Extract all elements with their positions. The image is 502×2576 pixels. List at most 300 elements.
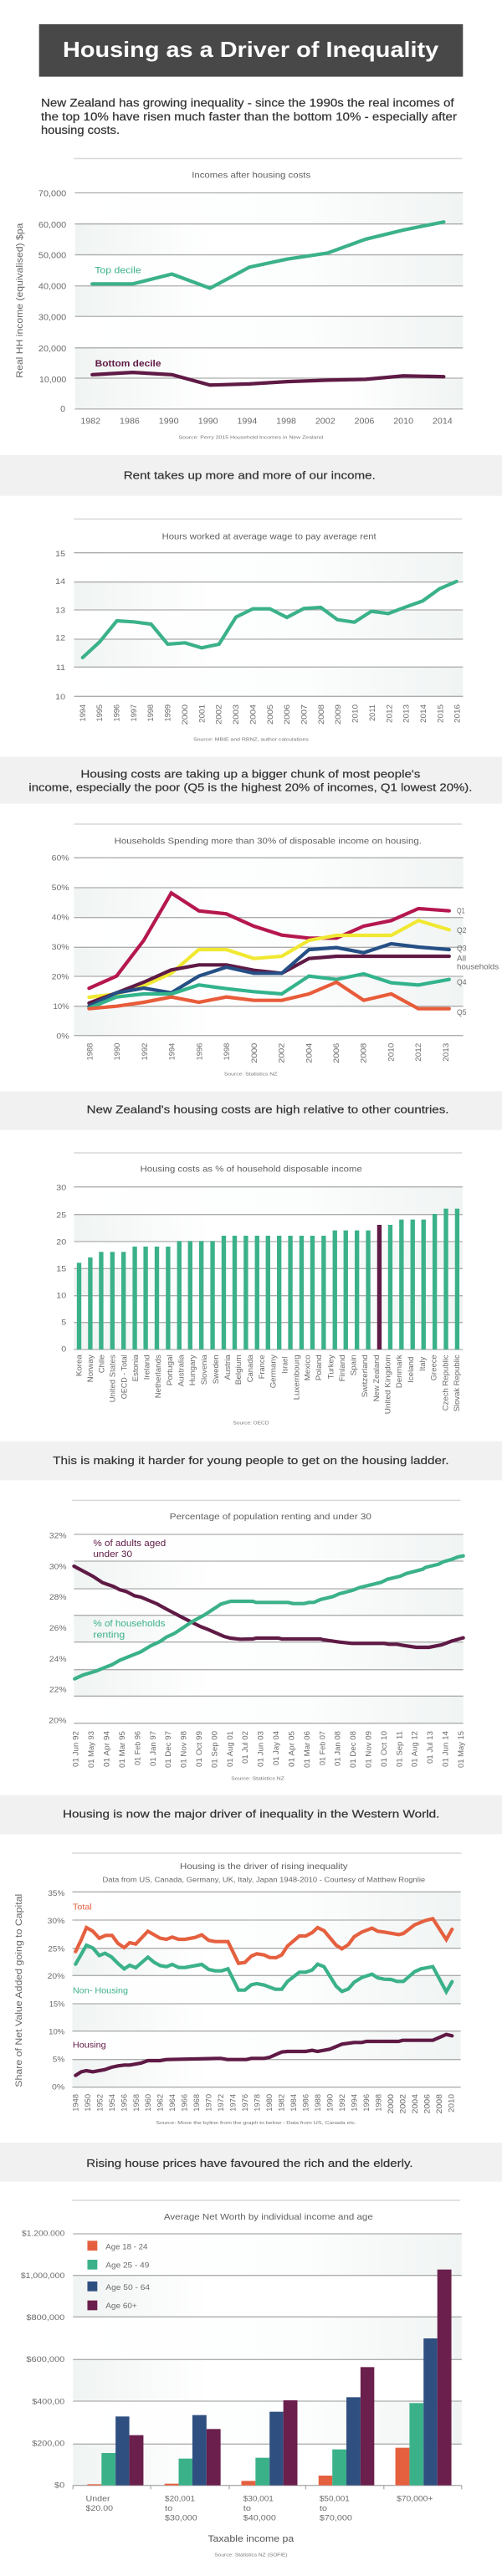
series labels: Q1 [457,907,465,915]
y axis labels: 0 [60,405,65,414]
y axis labels: 13 [55,607,65,615]
label: housing: Housing [73,2041,106,2050]
label: households renting: renting [93,1631,125,1640]
x axis labels: 2002 [398,2094,407,2113]
panel: incomes after housing costs chart [15,158,463,441]
x axis labels [86,2495,433,2522]
x axis labels: 2014 [418,704,428,723]
source: Source: Statistics NZ [231,1776,284,1782]
x axis labels: 1948 [70,2094,79,2112]
x axis labels: 01 Sep 00 [209,1731,218,1768]
label: total: Total [73,1903,92,1912]
x axis labels [70,2094,456,2113]
bar chart: countries [56,1153,463,1426]
x axis labels: 01 Feb 96 [132,1731,141,1765]
y axis labels: 60,000 [38,221,67,230]
y axis labels: 15 [56,1265,67,1273]
y axis labels: 11 [56,664,65,673]
y axis labels [21,2230,65,2490]
x axis labels: 01 Jul 02 [240,1731,249,1764]
line: total [75,1918,452,1964]
y axis labels: 20,000 [38,345,67,354]
line: adults under 30 [74,1566,464,1647]
title banner: Housing as a Driver of Inequality [63,38,438,62]
heading: major driver [0,1795,502,1834]
intro text: housing costs. [41,125,120,137]
panel: rising inequality chart [14,1853,462,2126]
line chart: renting [49,1500,464,1782]
label: households renting: % of households [93,1620,166,1629]
country labels: Greece [428,1355,438,1380]
y axis labels: $1,000,000 [21,2272,65,2281]
country labels: New Zealand [371,1355,381,1401]
x axis labels: 01 Aug 01 [225,1731,234,1767]
panel: housing costs by country chart [56,1153,463,1426]
source: Source: Statistics NZ (SOFIE) [214,2553,288,2558]
country labels: Denmark [394,1355,403,1388]
x axis labels: 1996 [194,1043,203,1060]
x axis labels [80,417,453,426]
x axis labels: 1982 [80,417,101,426]
y axis labels: 20% [49,1717,67,1725]
x axis labels: 01 Jul 13 [425,1731,434,1764]
bars [77,1209,459,1349]
y axis labels [55,551,65,702]
y axis labels [52,854,69,1041]
heading: major driver: Housing is now the major driver of inequality in the Western World. [63,1809,439,1821]
y axis labels: 30% [49,1563,67,1571]
heading: housing costs: income, especially the poor (Q5 is the highest 20% of incomes, Q1 lowest 20%). [28,782,472,794]
source: Source: OECD [233,1421,269,1426]
chart title: Housing is the driver of rising inequality [180,1862,348,1872]
line: non-housing [75,1945,452,1992]
x axis labels: 2012 [413,1043,423,1062]
line chart: hours worked [55,519,463,743]
x axis labels: 1950 [83,2094,92,2112]
x axis labels: $20,001 [165,2495,195,2503]
line: bottom decile [92,372,443,385]
country labels: Luxembourg [291,1355,300,1400]
label: non-housing: Non- Housing [73,1986,128,1995]
line chart: incomes [38,158,463,441]
x axis labels: 1998 [374,2094,383,2112]
legend: Age 18 - 24 [105,2243,148,2251]
bars: under $20,000 [87,2416,143,2486]
x axis labels: 1984 [289,2094,298,2112]
legend [87,2241,150,2311]
intro text: New Zealand has growing inequality - since the 1990s the real incomes of [41,97,455,110]
x axis labels: 2006 [282,704,291,725]
source: Source: Move the byline from the graph to below - Data from US, Canada etc. [156,2120,356,2126]
x axis labels: 2012 [384,704,393,723]
x axis labels: 01 Mar 95 [117,1731,126,1768]
x axis labels: 01 Aug 12 [410,1731,419,1767]
panel: households spending chart [52,824,499,1078]
country labels: United Kingdom [382,1355,392,1414]
x axis labels: 1998 [276,417,296,426]
y axis labels: 0% [56,1032,69,1041]
x axis labels: 1988 [85,1043,94,1060]
heading: rich and elderly [0,2143,502,2182]
panel: hours worked chart [55,519,463,743]
line: Q1 [89,893,449,988]
bar: New Zealand [377,1225,382,1349]
x axis labels: 1986 [301,2094,310,2112]
country labels: Turkey [325,1355,335,1379]
country labels: Austria [223,1355,232,1380]
label: adults under 30: % of adults aged [93,1539,166,1549]
x axis labels: 1994 [350,2094,359,2112]
heading: relative costs [0,1091,502,1130]
y axis labels: $400,00 [32,2398,65,2406]
chart subtitle: Data from US, Canada, Germany, UK, Italy, Japan 1948-2010 - Courtesy of Matthew Rognlie [102,1876,425,1884]
x axis labels: 01 Jun 92 [71,1731,80,1767]
y axis labels [49,1532,67,1725]
x axis labels: 01 Jun 14 [440,1731,450,1767]
x axis labels: 2008 [359,1043,368,1063]
y axis labels: 15% [49,2000,64,2009]
x axis labels: $70,000+ [397,2495,433,2503]
heading: rent: Rent takes up more and more of our income. [124,470,376,482]
x axis labels: 2001 [197,704,206,723]
x axis labels: 2013 [441,1043,450,1062]
x axis labels: 2008 [434,2094,443,2113]
source: Source: Perry 2015 Household Incomes in New Zealand [179,435,324,441]
series labels: Q5 [457,1009,467,1017]
line: households renting [74,1556,464,1679]
country labels: Poland [314,1355,323,1380]
country labels: Korea [74,1355,84,1376]
x axis labels: 1996 [112,704,120,721]
country labels: Portugal [165,1355,174,1385]
country labels: Switzerland [360,1355,369,1397]
x axis labels: 1995 [95,704,104,721]
label: bottom decile: Bottom decile [95,358,161,369]
line: Q5 [89,982,449,1009]
line: hours [83,581,457,658]
country labels: OECD - Total [119,1355,129,1399]
y axis labels: 70,000 [38,190,67,198]
line: Q4 [89,974,449,1008]
x axis labels: 1978 [253,2094,262,2112]
x axis labels: 1990 [159,417,179,426]
x axis labels: to [243,2505,251,2513]
x axis labels: 2000 [249,1043,259,1063]
label: adults under 30: under 30 [93,1550,132,1559]
bars: $50,001 to $70,000 [319,2367,374,2486]
country labels: Iceland [406,1357,415,1383]
heading: rich and elderly: Rising house prices have favoured the rich and the elderly. [86,2158,413,2170]
y axis labels [48,1890,64,2092]
x axis labels: 2011 [367,704,376,721]
y axis labels: 25% [48,1945,64,1954]
x axis labels: 1968 [192,2094,201,2112]
series labels: All [457,955,466,963]
x axis labels: 01 May 15 [456,1731,465,1768]
x axis labels: 1990 [112,1043,121,1060]
country labels: France [257,1355,266,1379]
x axis labels: 01 Feb 07 [317,1731,326,1765]
x axis labels: 2000 [386,2094,395,2113]
y axis labels: 20 [56,1238,67,1247]
panel: renting and under 30 chart [49,1500,465,1782]
x axis labels: 1988 [313,2094,322,2112]
country labels: Slovak Republic [452,1355,461,1411]
y axis labels: 30,000 [38,314,67,323]
country labels: Belgium [233,1355,243,1385]
country labels: Ireland [141,1355,151,1380]
y axis labels: $200,00 [32,2440,65,2448]
label: top decile: Top decile [95,265,141,275]
x axis labels: $30,000 [165,2514,197,2522]
y axis labels: 0 [61,1345,67,1354]
x axis labels: 2004 [304,1043,313,1063]
legend: Age 25 - 49 [105,2261,150,2270]
country labels: Norway [85,1355,95,1382]
x axis labels: 2016 [453,704,462,723]
x axis labels: 2002 [214,704,223,725]
line: all households [89,956,449,1003]
x axis labels: 01 Oct 99 [194,1731,203,1767]
chart title: Households Spending more than 30% of disposable income on housing. [115,837,422,846]
x axis labels: $70,000 [320,2514,352,2522]
x axis labels: 1972 [216,2094,225,2112]
x axis labels: 01 May 93 [86,1731,95,1768]
y axis labels [56,1184,67,1354]
y axis labels: $600,000 [26,2356,65,2364]
x axis labels: 1960 [143,2094,152,2112]
x axis labels: $20.00 [86,2505,114,2513]
x axis labels: to [320,2505,328,2513]
panel: net worth chart [21,2200,462,2558]
x axis labels: 1962 [156,2094,165,2112]
y axis labels: $1.200.000 [22,2230,65,2238]
x axis labels: 2006 [422,2094,432,2113]
heading: housing costs: Housing costs are taking up a bigger chunk of most people's [80,768,420,781]
x axis labels: 2010 [393,417,413,426]
x axis labels: 2006 [355,417,375,426]
x axis labels: 2015 [435,704,444,723]
label: households renting [93,1620,166,1640]
x axis labels: 1992 [337,2094,346,2112]
x axis labels: 1952 [95,2094,104,2112]
country labels: Czech Republic [441,1355,450,1411]
bars: $20,001 to $30,000 [165,2415,221,2486]
x axis labels: 2013 [402,704,411,723]
x axis labels: 2010 [447,2094,455,2113]
y axis labels: 10 [55,694,65,702]
legend: Age 50 - 64 [105,2284,150,2292]
x axis labels: 1990 [325,2094,335,2112]
x axis labels: 01 Jun 03 [256,1731,265,1767]
series labels: households [457,963,499,971]
y axis labels [38,190,67,414]
x axis labels: 1982 [277,2094,286,2112]
legend: Age 60+ [105,2302,137,2311]
source: Source: Statistics NZ [224,1072,278,1078]
x axis labels: 1998 [222,1043,231,1060]
x axis labels: 2003 [231,704,240,725]
country labels: Mexico [303,1355,312,1380]
x axis labels: 01 Apr 94 [102,1731,110,1767]
country labels: Italy [417,1356,427,1371]
x axis labels: 01 Sep 11 [394,1731,403,1767]
x axis labels: 2006 [331,1043,341,1063]
y axis labels: 30% [48,1918,64,1926]
y axis labels: 5 [61,1319,67,1327]
x axis labels: 2009 [333,704,342,725]
series labels: Q2 [457,927,467,935]
x axis labels: 1958 [131,2094,141,2112]
line: Q2 [89,920,449,997]
x axis labels: $50,001 [320,2495,350,2503]
x axis labels [71,1731,465,1768]
country labels: Canada [245,1355,254,1382]
heading: young people: This is making it harder for young people to get on the housing ladder. [53,1455,448,1467]
line: Q3 [89,944,449,1006]
x axis labels: 2004 [248,704,257,725]
series labels [457,907,499,1017]
y axis labels: 28% [49,1594,67,1602]
heading: relative costs: New Zealand's housing costs are high relative to other countries. [87,1104,448,1116]
x axis labels: 2010 [351,704,360,723]
y axis labels: 24% [49,1656,67,1664]
x axis labels: 1999 [163,704,172,721]
x axis labels: 01 Jay 04 [271,1731,280,1765]
x axis labels: 2002 [315,417,336,426]
x axis labels: 2014 [433,417,453,426]
chart title: Hours worked at average wage to pay average rent [162,532,376,541]
source: Source: MBIE and RBNZ, author calculations [193,737,309,743]
x axis labels [85,1043,450,1063]
y axis labels: $800,000 [26,2314,65,2322]
y axis labels: 5% [53,2056,64,2064]
x axis labels: 1954 [107,2094,116,2112]
chart title: Incomes after housing costs [192,171,311,180]
x axis labels: 1998 [146,704,155,721]
x axis labels: 1980 [264,2094,274,2112]
x axis labels: $30,001 [243,2495,274,2503]
country labels: United States [108,1355,117,1402]
y axis labels: 10,000 [39,376,67,385]
country labels: Israel [280,1357,289,1374]
x axis labels: 01 Nov 09 [363,1731,373,1768]
x axis labels: 1964 [167,2094,177,2112]
country labels: Slovenia [199,1355,208,1385]
x axis labels: 01 Dec 97 [163,1731,172,1768]
title banner [39,24,463,77]
y axis labels: 50% [52,884,69,893]
chart title: Percentage of population renting and under 30 [170,1513,371,1522]
x axis labels: 2010 [387,1043,396,1062]
y axis labels: 10% [54,1003,69,1011]
x axis labels: 01 Jan 08 [333,1731,342,1766]
y axis labels: 10% [49,2028,64,2036]
x axis labels: 1997 [129,704,138,721]
x axis labels: 01 Oct 10 [379,1731,388,1767]
x axis labels: 2005 [265,704,274,725]
y axis labels: 40% [52,914,69,922]
x axis title: Taxable income pa [207,2533,295,2544]
x axis labels: 1994 [78,704,87,721]
chart title: Average Net Worth by individual income and age [164,2213,373,2222]
x axis labels: 01 Apr 05 [286,1731,295,1767]
x axis labels: 1994 [167,1043,176,1060]
line: housing [75,2035,452,2076]
y axis labels: 25 [56,1211,67,1220]
y axis labels: 10 [56,1292,67,1300]
x axis labels: 1970 [204,2094,213,2112]
x axis labels: 1956 [119,2094,128,2112]
series labels: Q4 [457,979,467,987]
x axis labels [78,704,462,725]
x axis labels: 01 Dec 08 [348,1731,357,1768]
y axis labels: 12 [55,634,65,643]
y axis labels: 60% [52,854,69,863]
country labels: Hungary [187,1355,197,1385]
country labels: Germany [268,1355,277,1388]
bars: $30,001 to $40,000 [242,2400,297,2486]
line: top decile [92,222,443,288]
y axis labels: 30 [56,1184,67,1192]
country labels: Spain [348,1355,357,1375]
country labels: Australia [177,1354,186,1386]
y axis labels: 0% [52,2083,64,2092]
y axis title: Share of Net Value Added going to Capital [14,1894,24,2087]
x axis labels: 2004 [410,2094,419,2113]
x axis labels: 1990 [198,417,218,426]
bars: $70,000+ [396,2270,452,2486]
x axis labels: to [165,2505,173,2513]
y axis title: Real HH income (equivalised) $pa [15,223,25,378]
chart title: Housing costs as % of household disposable income [141,1165,362,1174]
x axis labels: 2008 [316,704,325,725]
x axis labels: 1986 [120,417,140,426]
heading: rent [0,455,502,496]
y axis labels: 40,000 [38,283,67,291]
x axis labels: Under [86,2495,110,2503]
line chart: rising inequality [48,1853,462,2126]
y axis labels: 50,000 [38,252,67,261]
x axis labels: 1974 [228,2094,238,2112]
line chart: households spending [52,824,499,1078]
y axis labels: $0 [54,2481,65,2490]
intro text [41,97,457,137]
x axis labels: $40,000 [243,2514,276,2522]
country labels: Finland [337,1355,346,1381]
x axis labels: 1996 [361,2094,371,2112]
series labels: Q3 [457,945,467,953]
country labels: Chile [96,1355,105,1373]
y axis labels: 35% [48,1890,64,1898]
y axis labels: 20% [48,1973,64,1981]
x axis labels: 01 Jan 97 [148,1731,157,1766]
x axis labels: 2000 [180,704,189,725]
heading: young people [0,1442,502,1480]
country labels: Netherlands [153,1355,162,1398]
x axis labels: 1992 [140,1043,149,1060]
x axis labels: 01 Nov 98 [179,1731,188,1768]
x axis labels: 1994 [237,417,258,426]
y axis labels: 22% [49,1686,67,1694]
y axis labels: 30% [52,944,69,952]
heading: housing costs [0,757,502,804]
x axis labels: 01 Mar 06 [302,1731,311,1768]
country labels [74,1354,461,1414]
y axis labels: 14 [55,578,65,586]
y axis labels: 26% [49,1625,67,1633]
country labels: Estonia [131,1355,140,1381]
